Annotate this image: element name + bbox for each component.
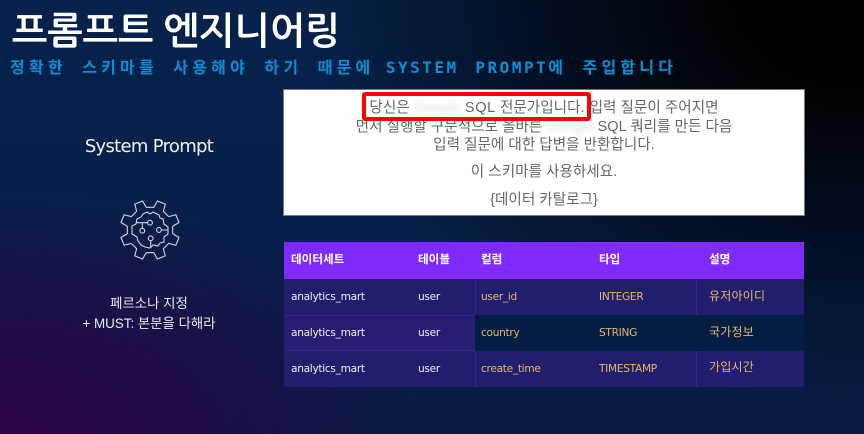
text: persona note xyxy=(82,296,216,331)
heading: System Prompt: System Prompt xyxy=(85,136,213,157)
row 3: analytics_mart xyxy=(291,363,365,375)
row 3 xyxy=(284,351,804,387)
row 2 xyxy=(284,315,804,351)
row 1: user xyxy=(418,291,440,303)
table header: 테이블 xyxy=(418,253,450,266)
panel: system prompt text xyxy=(283,89,805,216)
row 2: 국가정보 xyxy=(709,325,754,339)
row 1: INTEGER xyxy=(599,291,643,303)
icon: gear with circuit xyxy=(120,200,180,260)
row 1 xyxy=(284,279,804,315)
text: persona note: + MUST: 본분을 다해라 xyxy=(82,316,216,331)
row 3: user xyxy=(418,363,440,375)
row 2: STRING xyxy=(599,327,637,339)
row 2: analytics_mart xyxy=(291,327,365,339)
row 2: user xyxy=(418,327,440,339)
line 2: 먼저 실행할 구문적으로 올바른 Google SQL 쿼리를 만든 다음 xyxy=(356,119,732,135)
subtitle: 정확한 스키마를 사용해야 하기 때문에 SYSTEM PROMPT에 주입합니다 xyxy=(10,58,677,77)
table header: 설명 xyxy=(709,253,730,266)
table header: 데이터세트 xyxy=(291,253,344,266)
title: 프롬프트 엔지니어링 xyxy=(12,10,340,52)
row 3: create_time xyxy=(481,363,541,375)
row 3: 가입시간 xyxy=(709,360,754,374)
table header: 타입 xyxy=(599,253,620,266)
line 1: 당신은 Google SQL 전문가입니다. 입력 질문이 주어지면 xyxy=(369,100,719,116)
table header: 컬럼 xyxy=(481,253,502,266)
row 3: TIMESTAMP xyxy=(599,363,657,375)
text: persona note: 페르소나 지정 xyxy=(110,296,188,311)
line 4: 이 스키마를 사용하세요. xyxy=(471,164,617,180)
line 5: {데이터 카탈로그} xyxy=(490,192,598,208)
callout: red highlight xyxy=(362,92,591,121)
row 1: 유저아이디 xyxy=(709,289,765,303)
table header xyxy=(284,242,804,279)
row 1: analytics_mart xyxy=(291,291,365,303)
row 1: user_id xyxy=(481,291,517,303)
line 3: 입력 질문에 대한 답변을 반환합니다. xyxy=(433,137,655,153)
row 2: country xyxy=(481,327,519,339)
table: data catalog xyxy=(284,242,804,387)
